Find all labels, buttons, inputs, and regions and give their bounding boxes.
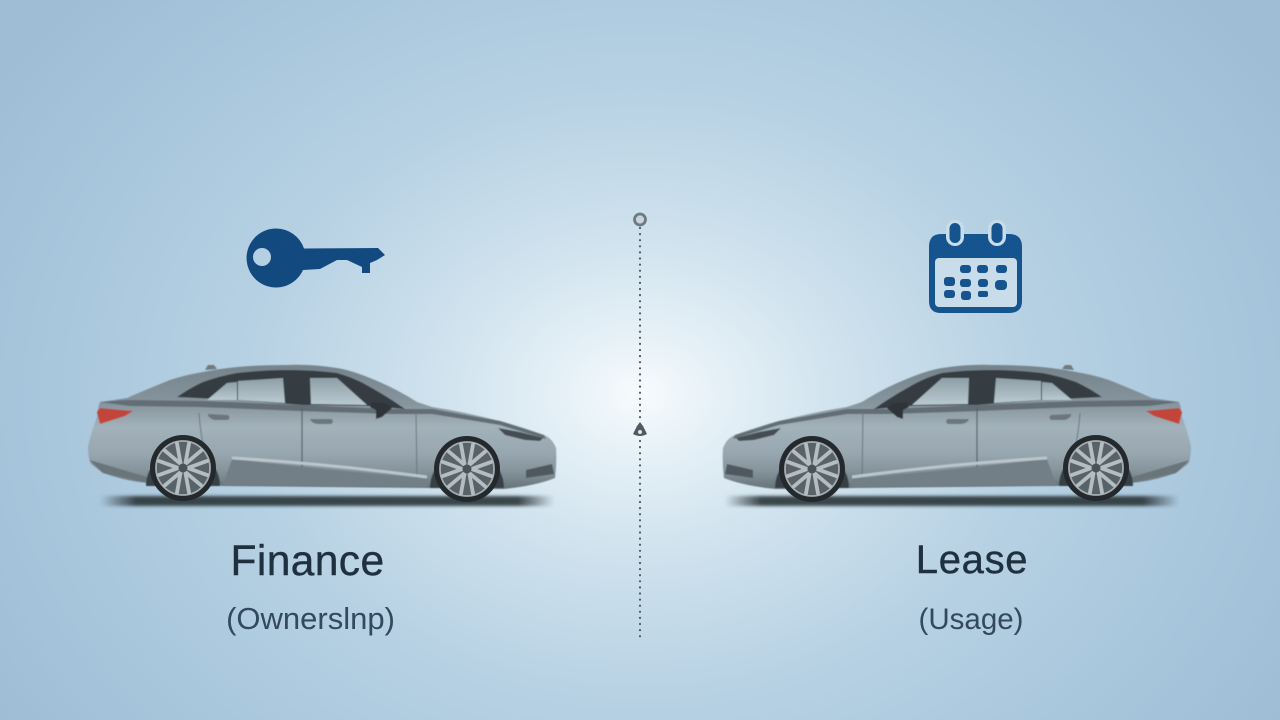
subheading: Ownership: (Ownerslnp) (226, 601, 395, 636)
marker: small bell (633, 422, 647, 436)
panel: finance (88, 228, 556, 636)
heading: Finance: Finance (230, 538, 384, 585)
heading: Lease: Lease (916, 538, 1028, 582)
panel: lease (723, 220, 1191, 636)
subheading: Usage: (Usage) (919, 603, 1023, 636)
car: finance (88, 365, 556, 506)
marker: top ring (634, 214, 646, 225)
car: lease (723, 365, 1191, 506)
divider: dotted line (633, 214, 647, 640)
icon: calendar (929, 220, 1022, 313)
icon: key (247, 228, 385, 287)
